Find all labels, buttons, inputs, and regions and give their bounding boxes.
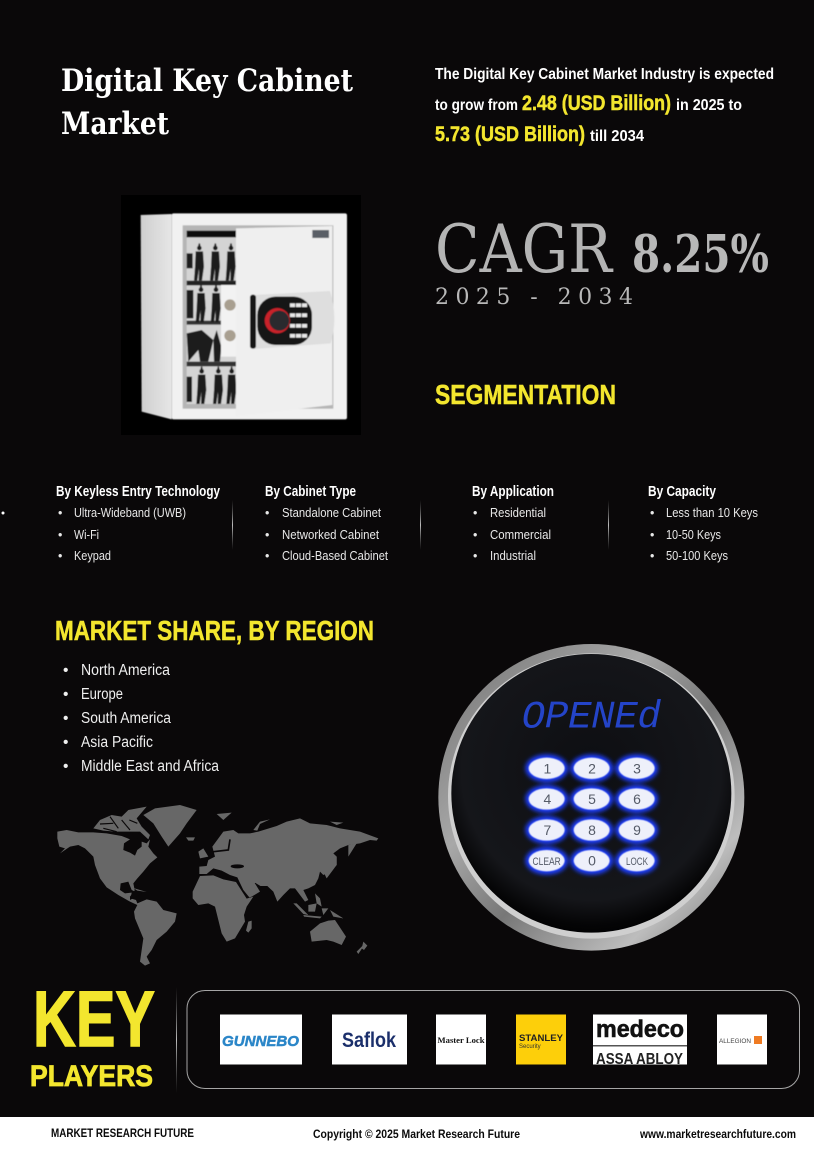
market forecast text: to grow from [435,97,518,114]
keypad labels: 5 [588,791,596,807]
logo: Saflok: Saflok [342,1029,396,1052]
keypad keys [529,758,655,871]
segment: by application: • [473,528,477,542]
image: key cabinet [121,195,361,435]
segment: by keyless entry technology: Wi-Fi [74,528,99,542]
logo: Stanley Security: Security [519,1044,541,1050]
CAGR value: 8.25% [632,225,769,285]
logo: Gunnebo [220,1014,302,1064]
title [61,63,354,142]
segment: by capacity: Less than 10 Keys [666,506,758,520]
segment: by application [472,484,554,563]
segment: by keyless entry technology: • [58,549,62,563]
CAGR value: CAGR [435,211,614,288]
map: Eurasia, Africa, Oceania [186,813,378,950]
region list: North America [81,662,170,679]
segment: by cabinet type: Cloud-Based Cabinet [282,549,388,563]
logo: Saflok [332,1014,407,1064]
logo: Stanley Security [516,1014,566,1064]
region list: Europe [81,686,123,703]
region list: • [63,758,68,775]
logo: Gunnebo: GUNNEBO [222,1033,299,1050]
segment: by cabinet type: Networked Cabinet [282,528,379,542]
segment: by cabinet type: Standalone Cabinet [282,506,381,520]
map: Americas [57,807,177,966]
keypad labels: 1 [543,760,551,776]
market forecast text: 2.48 (USD Billion) [522,92,671,115]
footer: MARKET RESEARCH FUTURE [51,1128,194,1140]
segment: by capacity: 50-100 Keys [666,549,728,563]
keypad ring [438,644,744,951]
segment: by capacity: • [650,506,654,520]
keypad labels: 9 [633,822,641,838]
segment: by application: Commercial [490,528,551,542]
segment: by keyless entry technology: Keypad [74,549,111,563]
logo: Medeco Assa Abloy [593,1014,687,1068]
segment: by application: • [473,549,477,563]
image: electronic keypad [438,644,744,951]
segment: by keyless entry technology: • [58,528,62,542]
keypad face [451,654,731,933]
market forecast text [435,66,774,146]
keypad glow [525,754,658,875]
stray dot [2,512,4,514]
footer [0,1117,814,1150]
map: New Zealand south [357,944,365,954]
keypad labels: CLEAR [532,856,561,868]
segment: by cabinet type: By Cabinet Type [265,484,356,500]
keypad labels: 3 [633,760,641,776]
logo: Stanley Security: STANLEY [519,1033,564,1044]
region list [63,662,219,775]
segment: by capacity [648,484,758,563]
segment: by capacity: • [650,528,654,542]
title: Market [61,106,170,142]
keypad labels [532,760,648,869]
key players heading [30,974,155,1093]
segment: by application: Residential [490,506,546,520]
segment: by cabinet type [265,484,388,563]
world map [57,805,378,966]
map: Greenland [143,805,197,847]
key players heading: PLAYERS [30,1060,153,1093]
logo: Medeco Assa Abloy: ASSA ABLOY [596,1051,683,1068]
segment: by application: Industrial [490,549,536,563]
region list: • [63,662,68,679]
logo: Allegion: ALLEGION [719,1038,751,1045]
keypad labels: 2 [588,760,596,776]
segment: by application: • [473,506,477,520]
logo: Master Lock [436,1014,486,1064]
market forecast text: 5.73 (USD Billion) [435,123,585,146]
logo: Medeco Assa Abloy: medeco [596,1016,684,1043]
keypad labels: 0 [588,853,596,869]
region list: • [63,734,68,751]
title: Digital Key Cabinet [61,63,354,99]
region list: • [63,686,68,703]
segment: by capacity: • [650,549,654,563]
region list: South America [81,710,171,727]
keypad labels: 6 [633,791,641,807]
market forecast text: till 2034 [590,128,644,145]
logo: Allegion [717,1014,767,1064]
heading: market share by region: MARKET SHARE, BY REGION [55,615,374,646]
CAGR value: 2025 - 2034 [435,285,633,310]
key players heading: KEY [33,974,155,1063]
segment: by keyless entry technology [56,484,220,563]
region list: • [63,710,68,727]
key players panel [187,990,800,1088]
keypad labels: LOCK [626,856,648,868]
segment: by capacity: 10-50 Keys [666,528,721,542]
footer: Copyright © 2025 Market Research Future [313,1129,520,1141]
keypad labels: 8 [588,822,596,838]
logo: Master Lock: Master Lock [438,1036,485,1045]
segment: by cabinet type: • [265,528,269,542]
segment: by cabinet type: • [265,549,269,563]
segment: by keyless entry technology: By Keyless Entry Technology [56,484,220,500]
keypad display: OPENEd [522,695,661,740]
keypad labels: 7 [543,822,551,838]
segment: by cabinet type: • [265,506,269,520]
keypad labels: 4 [543,791,551,807]
heading: segmentation: SEGMENTATION [435,379,616,410]
footer: www.marketresearchfuture.com [639,1129,796,1141]
segment: by keyless entry technology: • [58,506,62,520]
segment: by keyless entry technology: Ultra-Wideband (UWB) [74,506,186,520]
segment: by capacity: By Capacity [648,484,716,500]
CAGR value [435,211,769,310]
segment: by application: By Application [472,484,554,500]
market forecast text: in 2025 to [676,97,742,114]
region list: Middle East and Africa [81,758,219,775]
region list: Asia Pacific [81,734,153,751]
